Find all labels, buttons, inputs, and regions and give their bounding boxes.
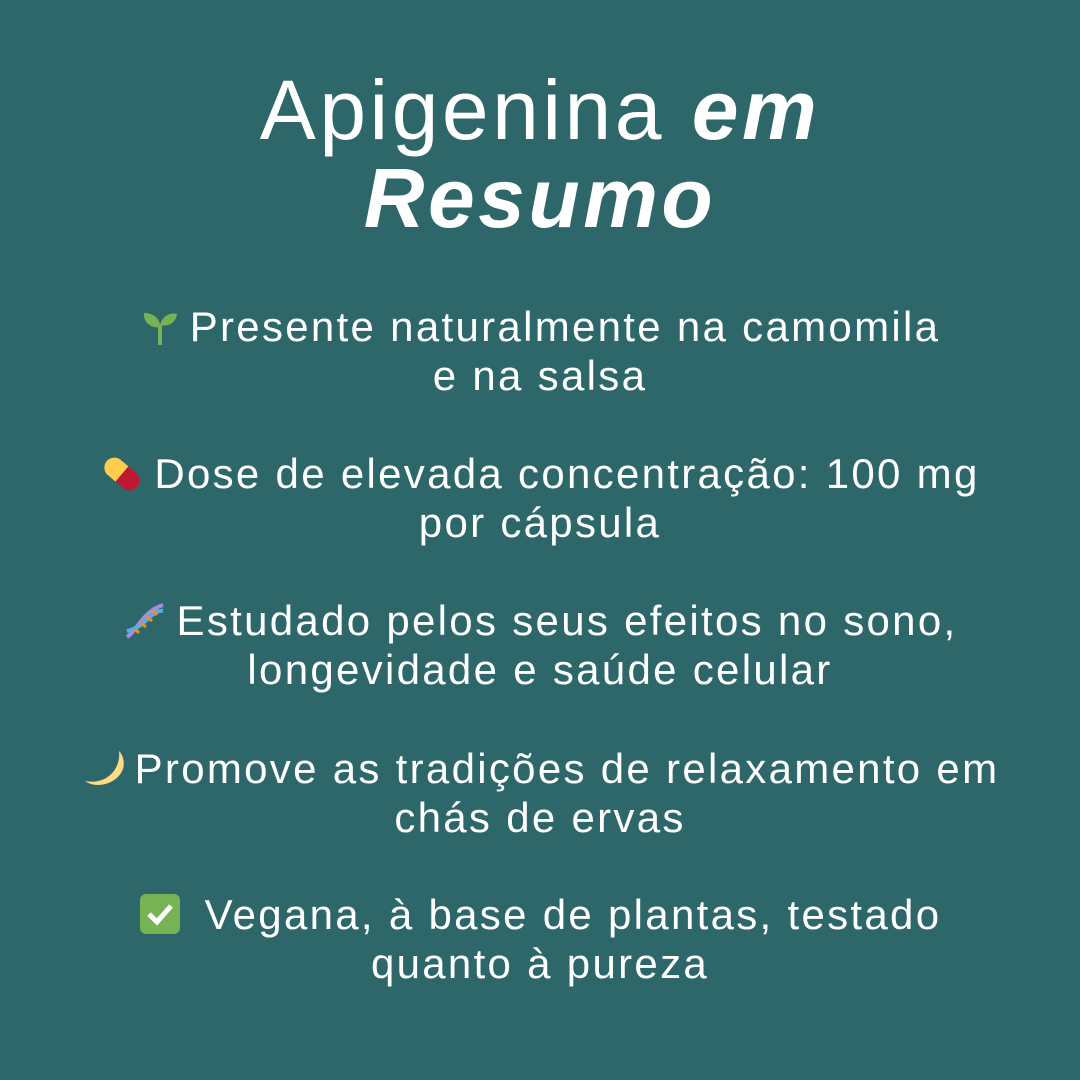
item: estudado (126, 597, 957, 693)
title (260, 63, 820, 245)
item: camomila (144, 303, 940, 399)
icon: check (140, 894, 180, 934)
item: camomila: e na salsa (433, 352, 647, 399)
icon: dna (126, 603, 164, 639)
item: estudado: Estudado pelos seus efeitos no sono, (177, 597, 957, 644)
item: camomila: Presente naturalmente na camomila (190, 303, 940, 350)
title: Resumo (364, 151, 716, 245)
item: dose: por cápsula (419, 499, 661, 546)
item: relaxamento (85, 745, 999, 841)
icon: seedling (144, 313, 177, 345)
item: estudado: longevidade e saúde celular (247, 646, 833, 693)
icon: pill (104, 458, 140, 490)
icon: moon (85, 751, 124, 785)
item: vegana (140, 891, 941, 987)
title: Apigenina em (260, 63, 820, 157)
item: relaxamento: chás de ervas (394, 794, 686, 841)
item: vegana: Vegana, à base de plantas, testado (205, 891, 941, 938)
item: vegana: quanto à pureza (371, 940, 709, 987)
item: dose (104, 450, 980, 546)
item: dose: Dose de elevada concentração: 100 mg (154, 450, 980, 497)
item: relaxamento: Promove as tradições de relaxamento em (135, 745, 999, 792)
